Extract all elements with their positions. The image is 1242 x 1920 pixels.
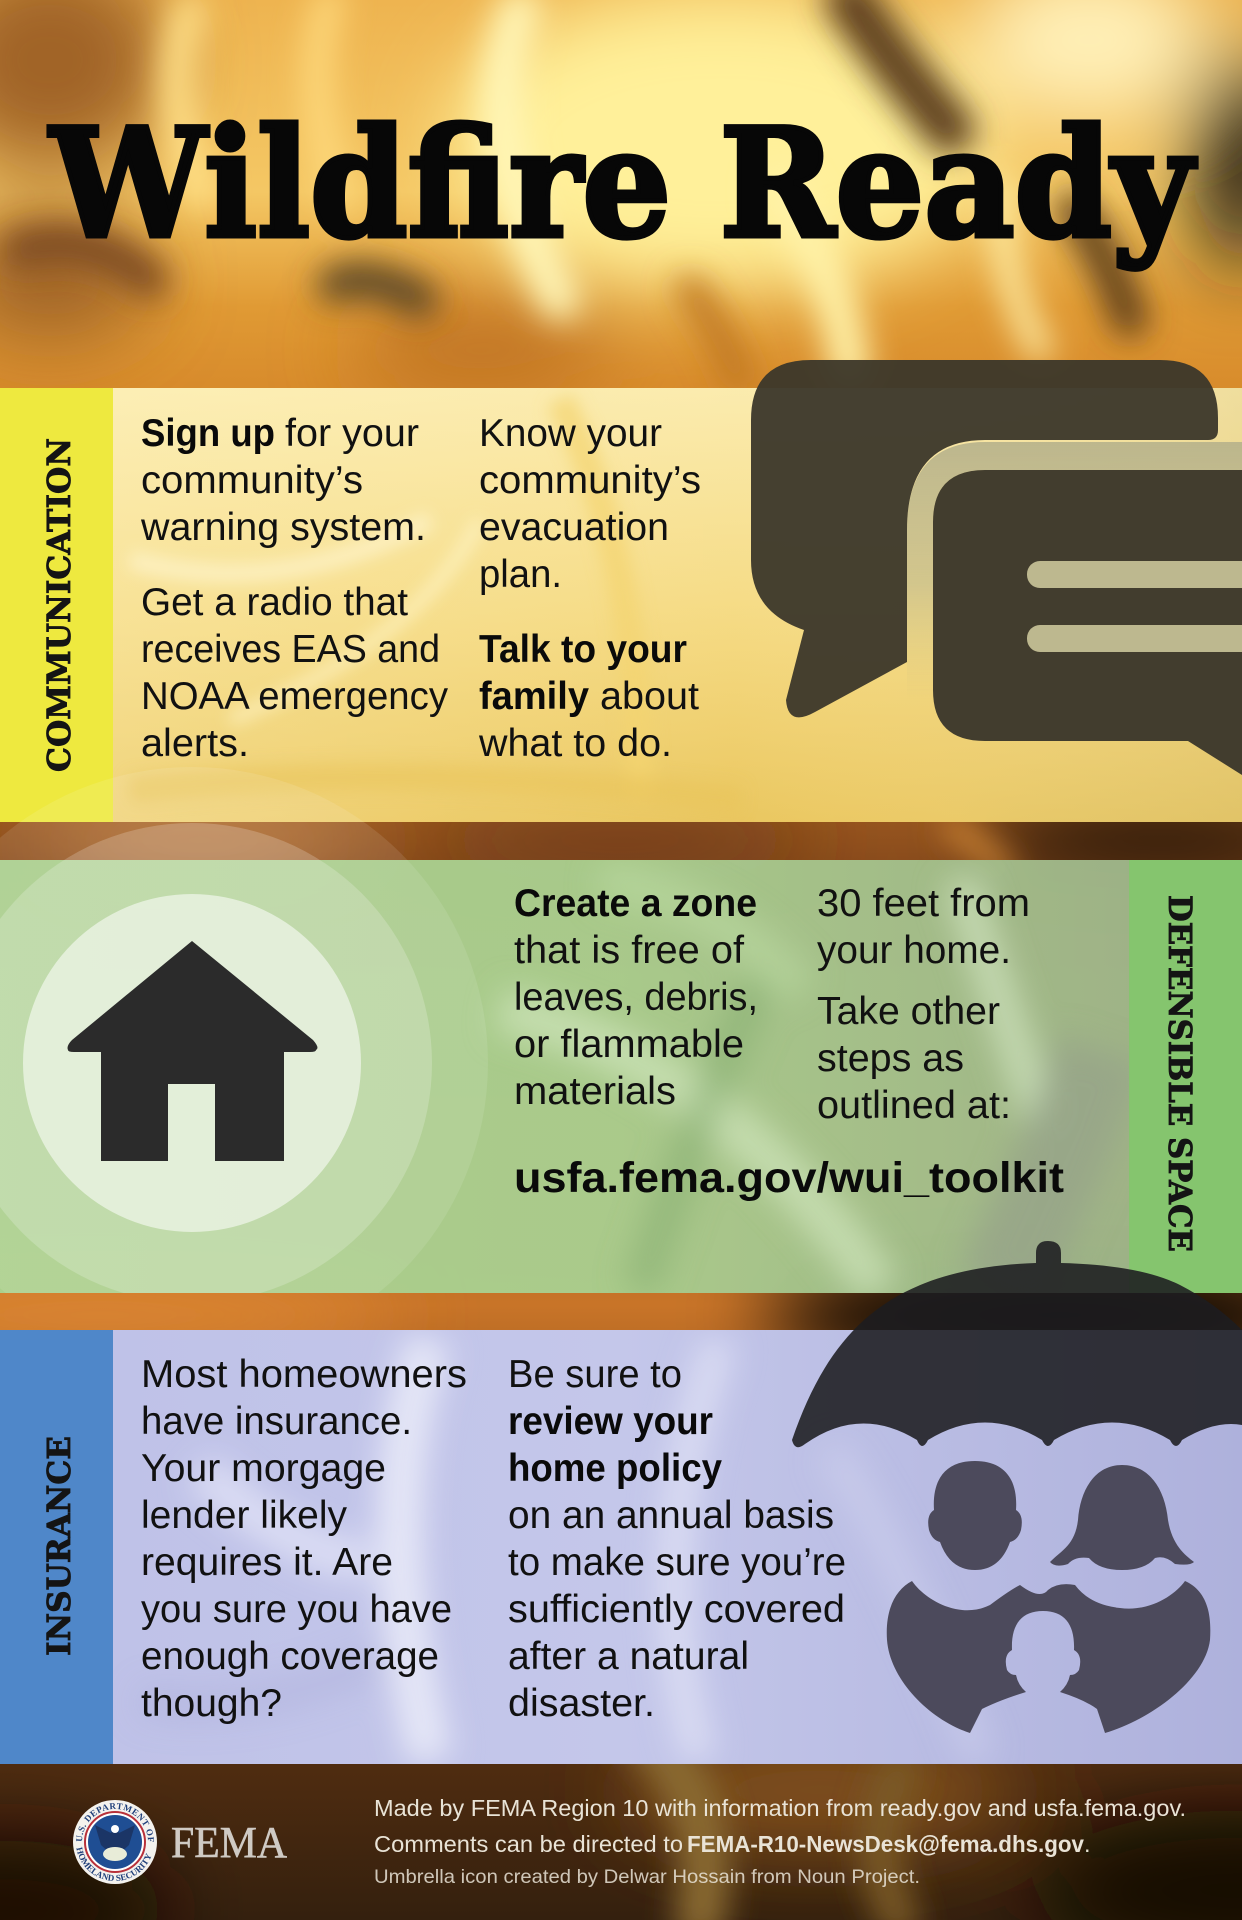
text column: sign up and radio: for your xyxy=(285,412,419,455)
insurance tab xyxy=(0,1330,113,1764)
text column: homeowners: lender likely xyxy=(141,1494,347,1537)
footer credit text: . xyxy=(1084,1831,1091,1857)
communication label: COMMUNICATION xyxy=(40,438,78,772)
communication tab xyxy=(0,388,113,822)
text column: sign up and radio: alerts. xyxy=(141,722,249,765)
link: toolkit url: usfa.fema.gov/wui_toolkit xyxy=(514,1154,1064,1202)
text column: review policy: home policy xyxy=(508,1447,722,1490)
logo: FEMA wordmark: FEMA xyxy=(171,1818,287,1867)
text column: sign up and radio: NOAA emergency xyxy=(141,675,448,718)
footer credit text: FEMA-R10-NewsDesk@fema.dhs.gov xyxy=(687,1831,1084,1857)
father head xyxy=(928,1461,1022,1570)
insurance label: INSURANCE xyxy=(40,1436,78,1656)
text column: sign up and radio: Get a radio that xyxy=(141,581,408,624)
text column: homeowners: Your morgage xyxy=(141,1447,386,1490)
text column: evacuation and family: evacuation xyxy=(479,506,669,549)
text column: review policy xyxy=(508,1353,846,1725)
text column: create a zone: materials xyxy=(514,1070,676,1113)
text column: homeowners xyxy=(141,1353,467,1725)
text column: create a zone: that is free of xyxy=(514,929,744,972)
parents shoulders with child cutout xyxy=(887,1581,1210,1733)
text column: sign up and radio: community’s xyxy=(141,459,363,502)
text column: evacuation and family: Talk to your xyxy=(479,628,687,671)
text column: evacuation and family: Know your xyxy=(479,412,662,455)
text column: review policy: review your xyxy=(508,1400,713,1443)
icon: speech bubbles xyxy=(751,360,1242,775)
text column: review policy: sufficiently covered xyxy=(508,1588,845,1631)
text column: evacuation and family: family xyxy=(479,675,589,718)
text column: sign up and radio xyxy=(140,412,448,765)
footer credit text: Made by FEMA Region 10 with information from ready.gov and usfa.fema.gov. xyxy=(374,1795,1186,1821)
text column: homeowners: have insurance. xyxy=(141,1400,412,1443)
logo: DHS seal: HOMELAND SECURITY xyxy=(76,1846,152,1881)
text column: review policy: Be sure to xyxy=(508,1353,682,1396)
text column: evacuation and family: what to do. xyxy=(478,722,672,765)
text column: review policy: disaster. xyxy=(508,1682,655,1725)
footer credit text: Comments can be directed to xyxy=(374,1831,683,1857)
defensible space label: DEFENSIBLE SPACE xyxy=(1161,895,1199,1252)
icon: family xyxy=(887,1461,1210,1733)
text column: homeowners: enough coverage xyxy=(141,1635,439,1678)
panel: defensible space xyxy=(0,767,1242,1359)
text column: create a zone: Create a zone xyxy=(514,882,757,925)
text column: sign up and radio: Sign up xyxy=(141,412,275,455)
text column: review policy: after a natural xyxy=(508,1635,749,1678)
text column: create a zone xyxy=(514,882,758,1113)
concentric circles behind house xyxy=(0,767,488,1293)
mother head xyxy=(1050,1465,1194,1570)
text column: evacuation and family: about xyxy=(600,675,699,718)
text column: homeowners: Most homeowners xyxy=(141,1353,467,1396)
footer credit text xyxy=(374,1795,1186,1888)
icon: umbrella xyxy=(792,1241,1242,1447)
text column: 30 feet: Take other xyxy=(817,990,1000,1033)
footer xyxy=(73,1795,1186,1888)
text column: homeowners: you sure you have xyxy=(141,1588,452,1631)
text column: 30 feet: your home. xyxy=(817,929,1011,972)
defensible space tab xyxy=(1129,860,1242,1293)
logo: DHS seal: U.S. DEPARTMENT OF xyxy=(76,1803,154,1842)
icon: house xyxy=(68,941,317,1161)
text column: 30 feet: 30 feet from xyxy=(817,882,1030,925)
text column: review policy: to make sure you’re xyxy=(508,1541,846,1584)
text column: 30 feet xyxy=(817,882,1030,1127)
text column: evacuation and family: community’s xyxy=(479,459,701,502)
text column: create a zone: or flammable xyxy=(514,1023,744,1066)
text column: 30 feet: outlined at: xyxy=(817,1084,1011,1127)
text column: create a zone: leaves, debris, xyxy=(514,976,758,1019)
text column: evacuation and family: plan. xyxy=(479,553,562,596)
logo: DHS seal xyxy=(73,1800,157,1884)
text column: evacuation and family xyxy=(478,412,701,765)
panel: insurance xyxy=(0,1241,1242,1764)
text column: sign up and radio: warning system. xyxy=(140,506,426,549)
text column: sign up and radio: receives EAS and xyxy=(141,628,440,671)
text column: review policy: on an annual basis xyxy=(508,1494,834,1537)
panel: communication xyxy=(0,360,1242,822)
text column: homeowners: though? xyxy=(141,1682,282,1725)
text column: homeowners: requires it. Are xyxy=(141,1541,393,1584)
text column: 30 feet: steps as xyxy=(817,1037,964,1080)
footer credit text: Umbrella icon created by Delwar Hossain from Noun Project. xyxy=(374,1866,920,1888)
